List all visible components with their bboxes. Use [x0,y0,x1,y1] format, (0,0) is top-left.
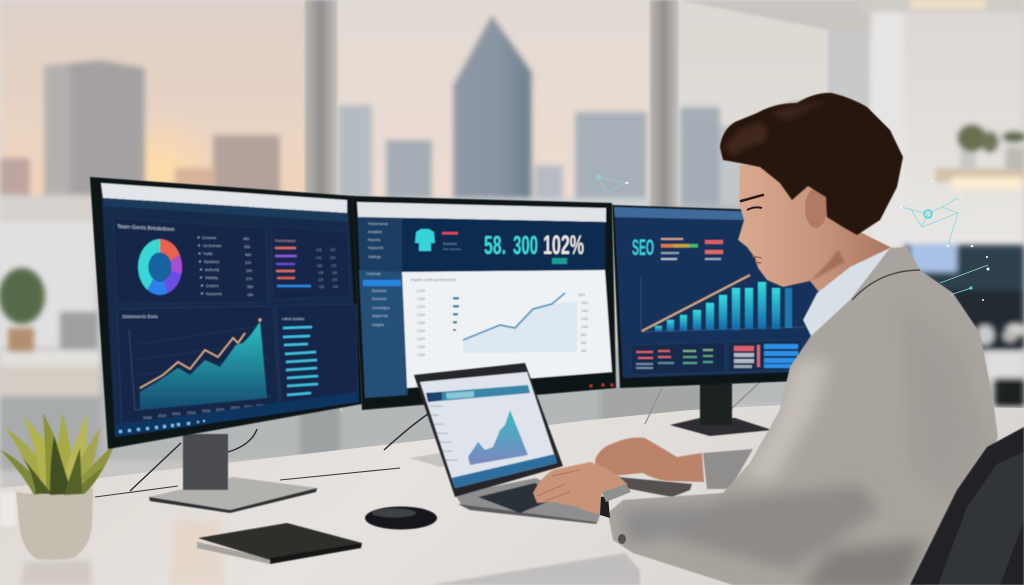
finger lines [537,470,580,501]
front hand [533,462,628,515]
ear [805,188,827,228]
jacket shading [620,352,926,585]
donut legend list: Backlinks [204,260,219,264]
screen [101,183,359,437]
donut legend list: 480 [243,237,249,241]
pot [16,488,93,560]
laptop chart [430,404,528,465]
horizontal metric bars: Latest updates [282,317,305,321]
desk surface [0,382,1024,585]
area chart: 2008 [143,416,151,420]
line chart: 1800 [578,293,585,297]
monitor 2: KPI dashboard [352,196,616,410]
performance bars: 146 [316,256,322,260]
performance bars: 170 [331,264,337,268]
monitor 1 stand [149,434,317,513]
area chart: 2014 [187,411,195,415]
eye and brow [741,195,845,281]
laptop chart: Traffic [431,413,440,417]
browser bar [357,202,606,222]
bottom metric tables [630,340,802,375]
KPI band [402,218,605,272]
laptop screen [420,372,557,488]
line chart [410,278,588,357]
browser bar [101,183,347,213]
keyboard [478,483,560,513]
donut legend list: Keywords [206,292,222,296]
red status dots [589,383,614,388]
heading: Team Gents Breakdown [117,224,175,233]
mouse [365,506,437,530]
performance bars: 120 [318,278,324,282]
performance bars: 980 [317,264,323,268]
bezel [352,196,616,410]
area chart: 2016 [216,408,224,412]
performance bars: Performance [275,239,296,243]
laptop [414,363,602,524]
area chart: 2018 [231,406,239,410]
top metrics [661,238,723,260]
leaves [0,412,115,495]
jacket body [608,247,998,585]
line chart: 600 [581,341,587,345]
sidebar items: Insights [372,323,384,327]
donut legend list: 370 [245,261,251,265]
area chart: Statements Data [122,314,158,320]
area chart: 2015 [202,409,210,413]
area chart: 2019 [244,405,252,409]
window frames and pillars [305,0,875,240]
line chart: 1400 [581,309,588,313]
shirt collar [803,247,892,338]
laptop chart: Growth [443,449,453,453]
bezel [90,177,362,449]
line chart: 3,400 [417,313,425,317]
line chart: 8,400 [417,289,425,293]
donut legend list: 350 [244,245,250,249]
area chart: 2020 [256,404,264,408]
bar chart with trend line [641,275,805,332]
sidebar items: Reports [368,238,381,242]
sidebar items [363,222,401,327]
line chart: 1000 [581,325,588,329]
sidebar items: Backlinks [372,289,387,293]
network graphic right of head [900,180,990,301]
KPI text and numbers: 300 [513,230,538,260]
KPI text and numbers [442,230,584,264]
donut legend list: 270 [246,277,252,281]
background office: dark wall, screen and desk on the right [905,244,1024,438]
icon: teal shirt [415,229,435,251]
donut legend list: On Domain [203,244,221,248]
wrist watch [600,484,631,518]
right-side sleeve [703,449,753,489]
laptop base [455,478,602,522]
sidebar items: Settings [368,255,381,259]
donut legend list [198,236,253,297]
KPI text and numbers: Domain [443,241,457,246]
sidebar items: Research [372,297,387,301]
donut legend list: 300 [247,285,253,289]
office chair [910,427,1024,585]
laptop lid [414,363,563,497]
line chart: Organic traffic performance [410,278,456,282]
monitor 3: SEO dashboard: SEO [632,235,654,260]
notebook [197,523,362,564]
line chart: 1600 [581,301,588,305]
area chart: 2012 [158,414,166,418]
screen [614,207,825,378]
line chart: 3,200 [417,329,425,333]
KPI text and numbers: Site overview [443,247,462,251]
sidebar items: Segments [372,314,388,318]
line chart: 2,500 [417,345,425,349]
person: seated analyst [533,93,998,585]
donut legend list: Authority [205,268,219,272]
sidebar items: Channels [366,272,381,276]
line chart: 3,370 [417,305,425,309]
monitor 3: SEO dashboard [612,205,825,388]
line chart: 400 [581,349,587,353]
performance bars: 240 [333,285,339,289]
sidebar items: Performance [368,222,388,226]
sidebar items: Analytics [368,230,382,234]
line chart: 800 [581,333,587,337]
line chart: 2,300 [417,353,425,357]
monitor 1: team dashboard [90,177,362,449]
plant in ceramic pot [0,412,115,560]
lapel [852,270,920,300]
laptop chart: Revenue [446,458,458,462]
white chart panel [402,270,612,388]
performance bars: 128 [316,248,322,252]
sidebar items: Keywords [368,246,384,250]
taskbar [115,392,359,437]
interior wall, shelf and lamp [860,0,1024,250]
area chart [122,314,270,420]
donut chart [138,239,182,295]
bezel [612,205,825,388]
line chart: 2,300 [417,297,425,301]
donut legend list: 240 [246,269,252,273]
performance bars: 128 [318,271,324,275]
cuff button [618,534,626,544]
donut legend list: Content [206,284,219,288]
donut legend list: 180 [247,293,253,297]
donut legend list: Domains [202,236,216,240]
performance bars: 230 [330,256,336,260]
back hand [595,438,704,482]
donut legend list: 460 [245,253,251,257]
performance bars: 150 [319,285,325,289]
donut legend list: Traffic [203,252,213,256]
panels [113,218,268,304]
sidebar [357,202,408,398]
line chart: 2,870 [417,337,425,341]
area chart: 2013 [172,412,180,416]
performance bars [275,239,339,289]
background left: plant on side table [0,268,720,470]
performance bars: 260 [332,271,338,275]
monitor 2 stand [410,395,480,467]
horizontal metric bars [282,317,318,395]
monitor 3 stand [670,383,772,436]
line chart: 3,300 [417,321,425,325]
network graphic left of head [595,174,628,192]
laptop chart: Visitors [434,422,444,426]
KPI text and numbers: 102% [543,230,584,260]
hair [720,93,903,235]
performance bars: 190 [332,278,338,282]
laptop chart: Sessions [440,440,453,444]
line chart: 1200 [581,317,588,321]
tablet under hand [618,477,692,497]
performance bars: 220 [330,248,336,252]
KPI text and numbers: 58. [484,230,506,260]
neck and face [738,165,892,322]
sidebar items: Campaigns [372,306,390,310]
laptop chart: Overview [430,404,443,408]
donut legend list: Visibility [205,276,218,280]
laptop chart: Sources [437,431,449,435]
